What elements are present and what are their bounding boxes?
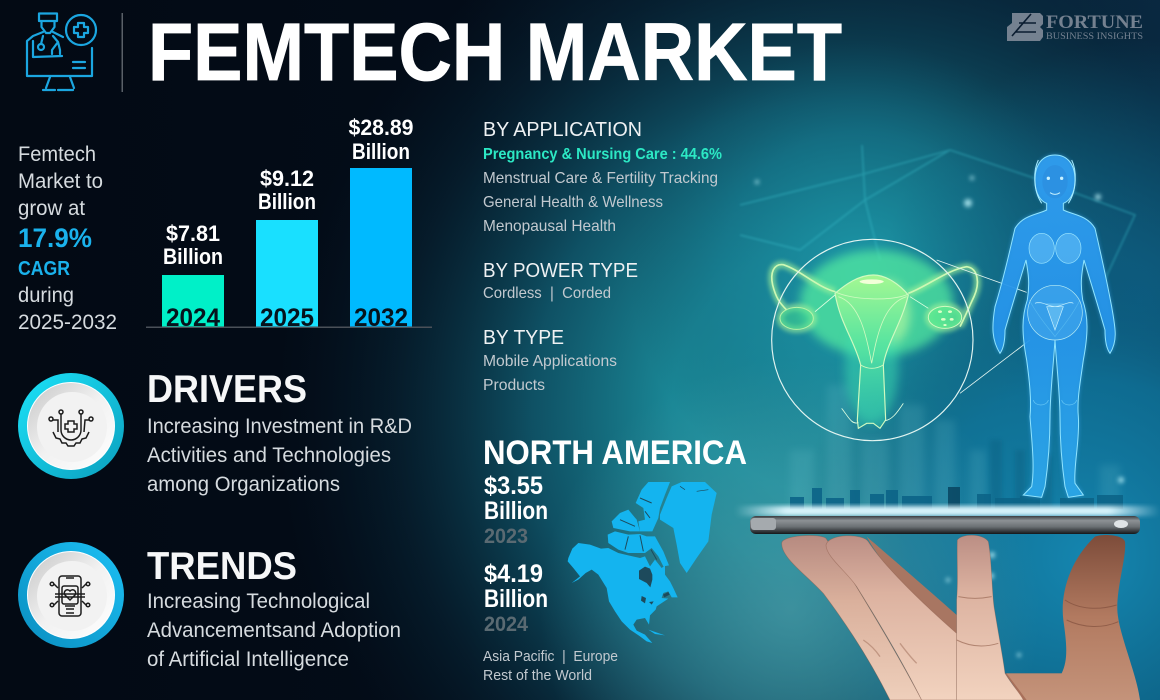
value 2024: $4.19 xyxy=(484,560,543,588)
magnifier circle xyxy=(772,239,973,441)
bar 2024: Billion xyxy=(163,244,223,269)
bar 2032: Billion xyxy=(352,139,410,164)
panel: by application: General Health & Wellness xyxy=(483,194,663,211)
logo: Fortune Business Insights: BUSINESS INSIGHTS xyxy=(1046,32,1143,42)
bar 2032: 2032 xyxy=(354,304,408,332)
illustration: skyline xyxy=(790,385,1123,510)
CAGR text block: grow at xyxy=(18,197,85,220)
trends text: of Artificial Intelligence xyxy=(147,648,349,671)
drivers text: among Organizations xyxy=(147,473,340,496)
panel: by application xyxy=(483,119,722,235)
bar chart xyxy=(146,115,432,332)
panel: by application: Pregnancy & Nursing Care : 44.6% xyxy=(483,146,722,163)
other regions xyxy=(483,648,618,684)
panel: by power type: BY POWER TYPE xyxy=(483,260,638,282)
drivers heading: DRIVERS xyxy=(147,368,307,411)
bar 2024: 2024 xyxy=(166,304,220,332)
illustration: uterus with magnifier xyxy=(772,239,1030,441)
icon: phone with heart xyxy=(18,542,124,648)
illustration: hand xyxy=(782,535,1140,700)
CAGR text block xyxy=(18,143,117,334)
bar 2032: $28.89 xyxy=(348,115,414,140)
trends text xyxy=(147,590,401,671)
other regions: Asia Pacific | Europe xyxy=(483,648,618,665)
panel: by power type: Cordless | Corded xyxy=(483,285,611,302)
icon: gear with circuit xyxy=(18,373,124,479)
bar 2024 xyxy=(162,221,224,332)
header divider xyxy=(122,13,123,92)
panel: by application: BY APPLICATION xyxy=(483,119,642,141)
bar 2025 xyxy=(256,166,318,332)
bar 2025: 2025 xyxy=(260,304,314,332)
value 2023: $3.55 xyxy=(484,472,543,500)
value 2023: 2023 xyxy=(484,525,528,548)
bar 2024: $7.81 xyxy=(166,221,220,246)
CAGR text block: during xyxy=(18,284,74,307)
panel: drivers xyxy=(18,368,412,496)
trends text: Advancementsand Adoption xyxy=(147,619,401,642)
other regions: Rest of the World xyxy=(483,667,592,684)
panel: by type: Mobile Applications xyxy=(483,353,617,370)
CAGR text block: 17.9% xyxy=(18,223,92,253)
icon: doctor at monitor xyxy=(27,14,96,90)
panel: by power type xyxy=(483,260,638,302)
CAGR text block: Femtech xyxy=(18,143,96,166)
illustration: female body hologram xyxy=(993,155,1115,497)
bar 2032 xyxy=(348,115,414,332)
trends heading: TRENDS xyxy=(147,545,297,588)
CAGR text block: CAGR xyxy=(18,258,70,280)
panel: by application: Menstrual Care & Fertility Tracking xyxy=(483,170,718,187)
map: North America xyxy=(568,482,717,643)
logo: Fortune Business Insights: FORTUNE xyxy=(1046,12,1143,33)
CAGR text block: Market to xyxy=(18,170,103,193)
panel: by application: Menopausal Health xyxy=(483,218,616,235)
illustration: smartphone xyxy=(750,516,1140,534)
drivers text: Increasing Investment in R&D xyxy=(147,415,412,438)
bar 2025: $9.12 xyxy=(260,166,314,191)
bar 2025: Billion xyxy=(258,189,316,214)
glow above phone xyxy=(735,506,1160,516)
value 2023: Billion xyxy=(484,497,548,525)
value 2024: Billion xyxy=(484,585,548,613)
trends text: Increasing Technological xyxy=(147,590,370,613)
title: FEMTECH MARKET xyxy=(148,7,842,98)
panel: by type: BY TYPE xyxy=(483,327,564,349)
value 2024 xyxy=(484,560,548,636)
CAGR text block: 2025-2032 xyxy=(18,311,117,334)
value 2023 xyxy=(484,472,548,548)
panel: North America xyxy=(483,434,747,684)
drivers text xyxy=(147,415,412,496)
panel: by type: Products xyxy=(483,377,545,394)
region heading: NORTH AMERICA xyxy=(483,434,747,472)
panel: trends xyxy=(18,542,401,671)
logo: Fortune Business Insights xyxy=(1007,12,1143,42)
panel: by type xyxy=(483,327,617,394)
value 2024: 2024 xyxy=(484,613,528,636)
drivers text: Activities and Technologies xyxy=(147,444,391,467)
